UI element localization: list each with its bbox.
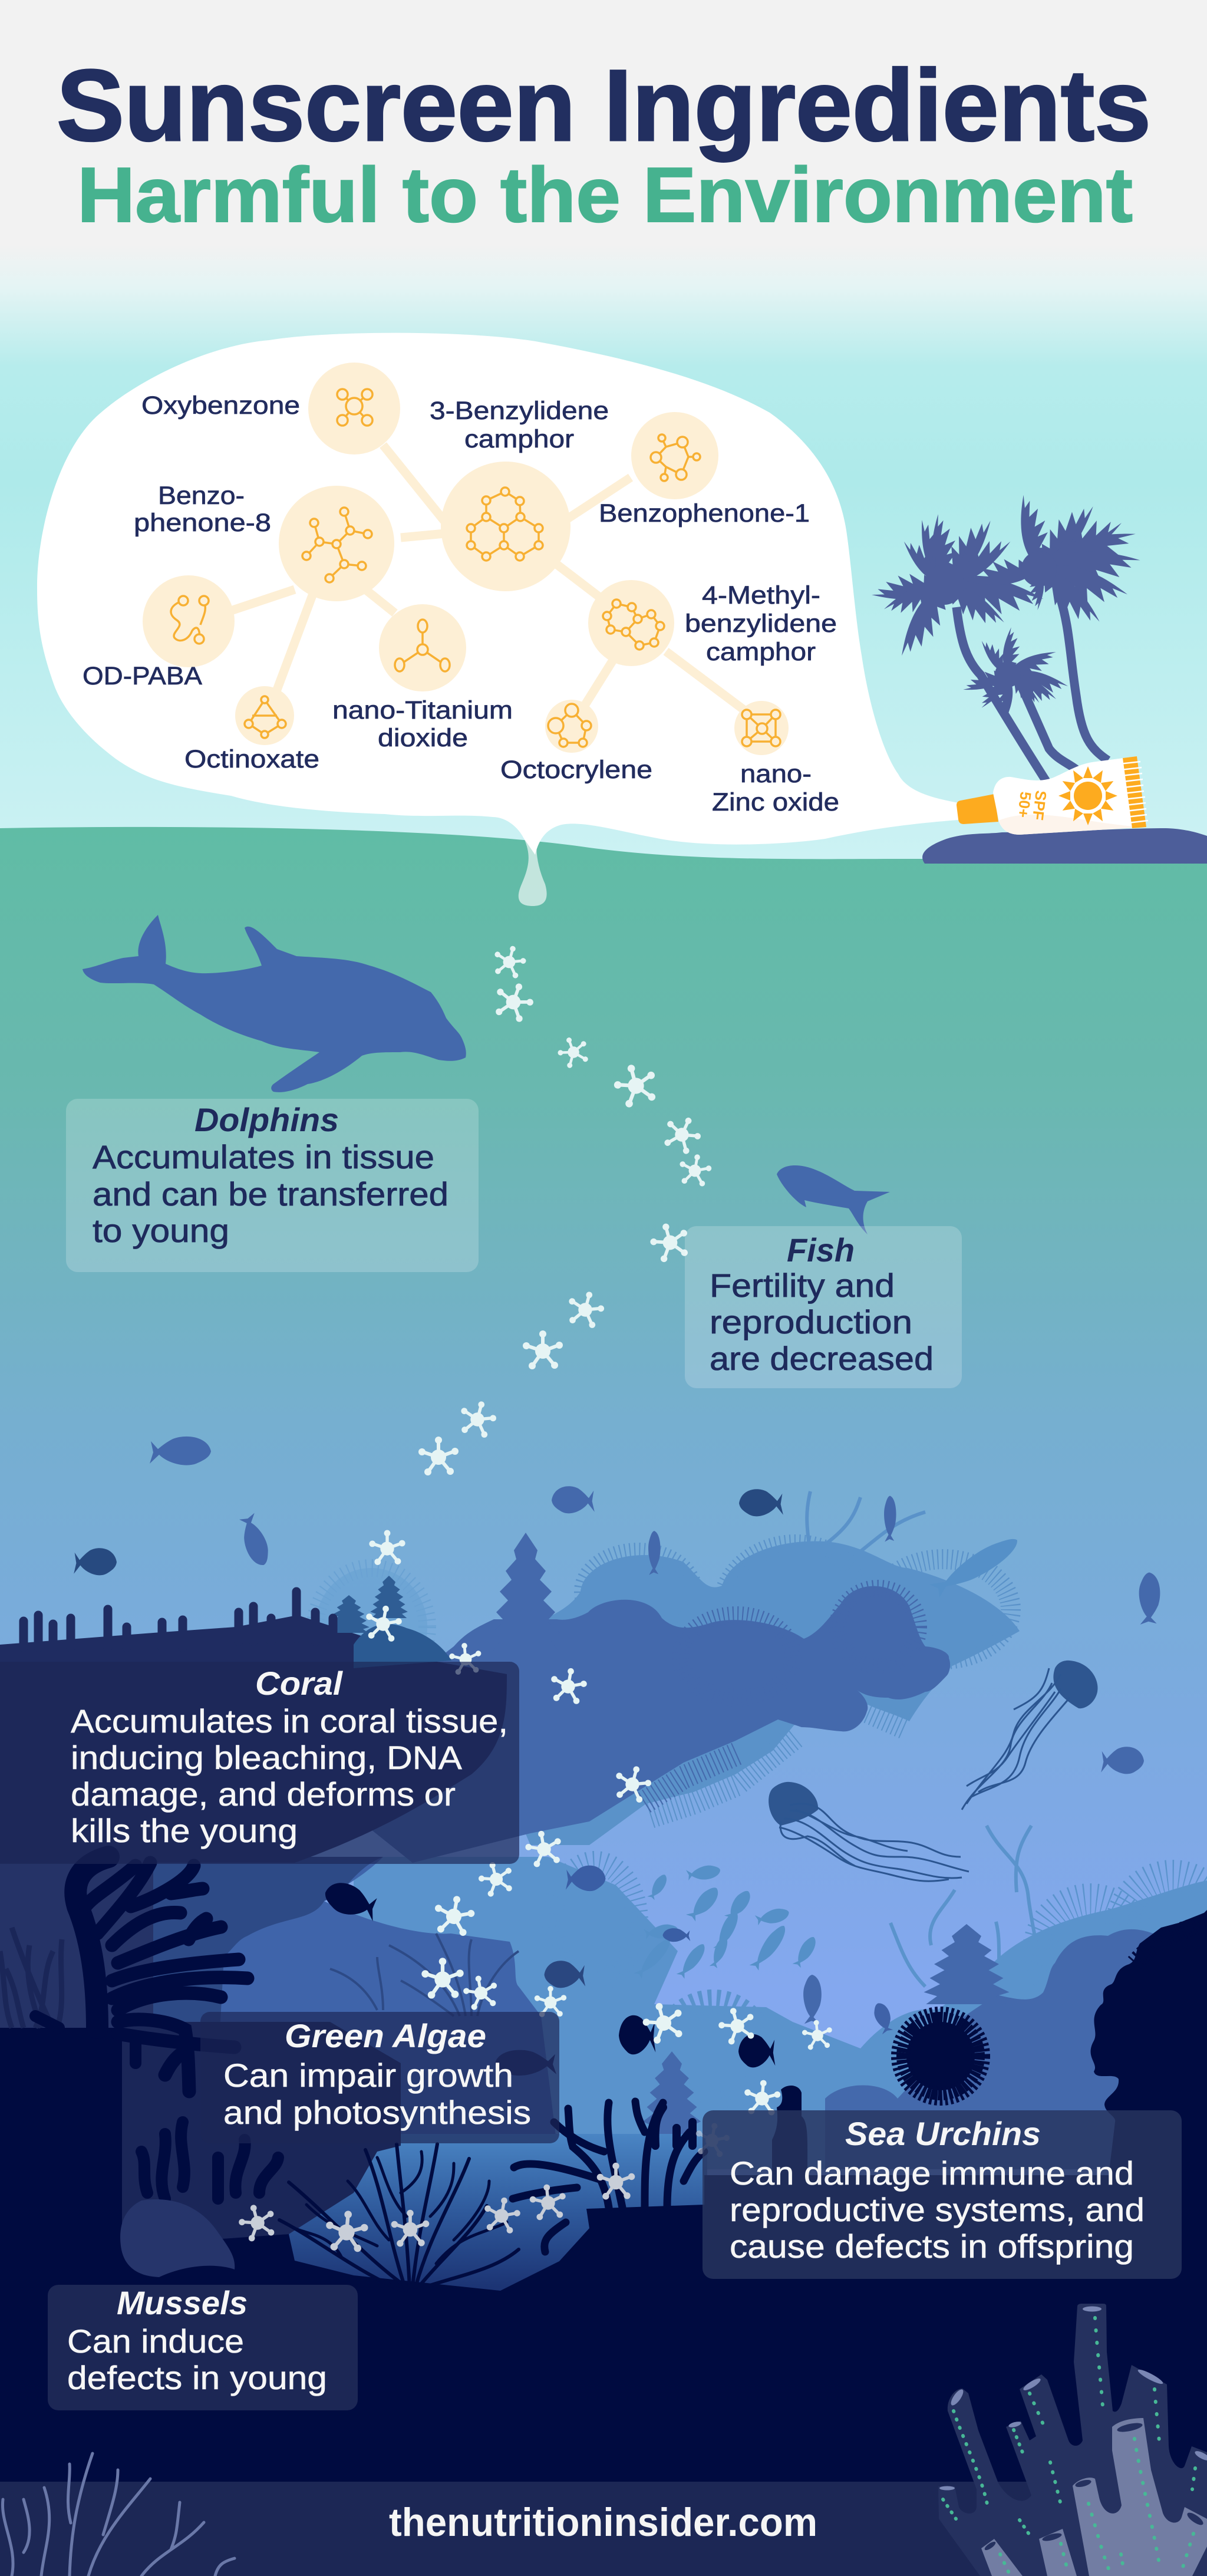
deep water behind foreground: [277, 2134, 707, 2299]
ingredient labels: Octinoxate: [184, 745, 319, 773]
speech cloud of ingredients: [37, 333, 958, 855]
node: Octocrylene: [545, 700, 598, 753]
info box: Green Algae: Green Algae: [285, 2017, 486, 2054]
lower particles on dark: [235, 2120, 732, 2254]
info box: Fish: are decreased: [710, 1340, 934, 1377]
palm trees: [870, 492, 1143, 781]
molecule diagram: [143, 363, 789, 755]
anemone on right mound: [924, 1924, 1009, 2004]
info box: Fish: Fertility and: [710, 1267, 895, 1304]
jellyfish 2: [962, 1661, 1098, 1810]
tube openings light: [939, 2306, 1207, 2490]
mid reef fringes: [642, 1589, 918, 1804]
reef fish above Fish box: [777, 1165, 890, 1234]
info box: Mussels: [48, 2284, 358, 2410]
sea urchin: [901, 2016, 981, 2096]
fan coral centre: [279, 2144, 519, 2291]
navy corals below green algae box: [141, 2122, 278, 2199]
info box: Dolphins: and can be transferred: [93, 1175, 448, 1213]
background fish: [74, 1437, 1160, 2076]
shell: [120, 2199, 235, 2277]
anemone near bottom: [643, 2051, 701, 2134]
background: ocean water: [0, 827, 1207, 2576]
SPF number: 50+: [1014, 790, 1035, 819]
school of small fish: [634, 1863, 819, 1981]
sea grass on reef: [330, 1933, 519, 2016]
sunscreen tube: [957, 756, 1148, 835]
info box: Fish: [685, 1226, 962, 1388]
second teal tuft: [328, 1595, 370, 1633]
footer band: [0, 2482, 1207, 2576]
mid reef mass: [295, 1586, 950, 1863]
ingredient labels: OD-PABA: [83, 662, 202, 690]
thin branching plant bottom-left: [2, 2453, 235, 2576]
ingredient labels: nano-Titanium: [332, 696, 513, 724]
dark coral row under coral box: [0, 1576, 507, 1863]
info box: Sea Urchins: [703, 2110, 1182, 2279]
dolphin: [83, 915, 466, 1092]
info box: Mussels: defects in young: [67, 2359, 327, 2396]
teal tufts: [370, 1576, 408, 1618]
right mass spiky fringe: [1135, 1923, 1207, 1963]
info box: Sea Urchins: Can damage immune and: [730, 2155, 1134, 2192]
light coral arm left: [981, 2539, 1023, 2576]
SPF label: SPF: [1029, 789, 1050, 821]
info box: Sea Urchins: cause defects in offspring: [730, 2228, 1134, 2265]
ingredient labels: camphor: [706, 638, 816, 666]
node: nano-Zinc oxide: [734, 701, 789, 755]
title: Sunscreen Ingredients: [57, 49, 1151, 162]
info box: Dolphins: Accumulates in tissue: [93, 1138, 434, 1175]
darker hill under coral box: [0, 1857, 383, 2169]
ingredient labels: camphor: [464, 425, 574, 453]
branching sprigs above coral: [807, 1491, 925, 1562]
node: nano-Titanium dioxide: [379, 604, 466, 691]
info box: Coral: [0, 1662, 519, 1864]
left background panel: [0, 1857, 153, 2169]
info box: Coral: inducing bleaching, DNA: [71, 1739, 463, 1776]
node: 3-Benzylidene camphor: [441, 462, 570, 591]
info box: Fish: Fish: [787, 1231, 855, 1269]
info box: Fish: reproduction: [710, 1303, 912, 1340]
ingredient labels: Oxybenzone: [141, 391, 300, 420]
info box: Coral: damage, and deforms or: [71, 1775, 456, 1813]
light coral arm middle: [1039, 2529, 1077, 2576]
tube crimp: [1123, 756, 1146, 828]
footer website url: thenutritioninsider.com: [389, 2500, 817, 2545]
foreground dark seabed: [0, 2028, 1207, 2576]
coral plume: [492, 1533, 560, 1651]
info box: Mussels: Mussels: [117, 2284, 248, 2321]
left fern fringe: [0, 1928, 62, 2028]
sunscreen drip: [519, 830, 547, 906]
tube nozzle: [957, 794, 998, 824]
info box: Dolphins: Dolphins: [194, 1101, 339, 1138]
info box: Dolphins: [66, 1099, 479, 1272]
info box: Coral: Coral: [255, 1665, 343, 1702]
sun icon: [1058, 766, 1117, 825]
lower coral fringes and grasses: [554, 1826, 1207, 2101]
connector lines: [224, 445, 748, 713]
branching coral centre right: [513, 2101, 704, 2252]
info box: Green Algae: and photosynthesis: [223, 2094, 531, 2131]
back coral body: [938, 2304, 1207, 2576]
node: Octinoxate: [235, 686, 294, 745]
info box: Green Algae: Can impair growth: [223, 2057, 513, 2094]
node: OD-PABA: [143, 575, 235, 667]
info box: Dolphins: to young: [93, 1212, 229, 1249]
tube coral bottom right: [938, 2304, 1207, 2576]
info box: Sea Urchins: reproductive systems, and: [730, 2191, 1145, 2228]
info box: Sea Urchins: Sea Urchins: [845, 2115, 1041, 2152]
small navy fingers: [655, 2107, 692, 2146]
tube body: [993, 756, 1146, 835]
island: [922, 828, 1207, 864]
palm crown 2: [965, 492, 1143, 635]
tube openings dark: [984, 2422, 1205, 2552]
right reef mound: [825, 1929, 1207, 2169]
teal hill: [354, 1624, 451, 1668]
info box: Coral: kills the young: [71, 1812, 298, 1849]
jellyfish 1: [769, 1782, 969, 1881]
hairy coral fringes: [584, 1544, 1011, 1816]
node: Benzophenone-1: [631, 412, 718, 499]
info box: Green Algae: [200, 2012, 559, 2143]
foreground branching coral left: [35, 1857, 248, 2091]
ingredient labels: 4-Methyl-: [702, 581, 820, 610]
ingredient labels: 3-Benzylidene: [430, 397, 609, 425]
chemical particles falling: [362, 942, 833, 2116]
ingredient labels: nano-: [740, 760, 812, 788]
right dark coral mass: [1091, 1910, 1207, 2181]
ingredient labels: Zinc oxide: [712, 788, 839, 816]
coral fingers: [24, 1592, 333, 1648]
palm crown 1: [870, 510, 1046, 665]
ingredient labels: [83, 391, 839, 816]
ingredient labels: phenone-8: [134, 509, 271, 537]
lower-left reef mass: [0, 1857, 560, 2169]
palm trunks: [957, 592, 1108, 781]
info box: Coral: Accumulates in coral tissue,: [71, 1702, 508, 1740]
ingredient labels: Benzo-: [158, 482, 245, 510]
ingredient labels: benzylidene: [685, 610, 837, 638]
ingredient labels: dioxide: [378, 724, 468, 752]
lower light coral layer: [354, 1857, 1207, 2169]
mid-navy patch under green algae box: [122, 2022, 401, 2246]
subtitle: Harmful to the Environment: [77, 151, 1133, 238]
background: sky: [0, 0, 1207, 872]
info box: Mussels: Can induce: [67, 2323, 244, 2360]
light coral main body: [1073, 2418, 1207, 2576]
node: Benzophenone-8: [279, 486, 394, 601]
background reef: faint ferns: [315, 1568, 427, 1686]
palm crown 3: [960, 627, 1070, 723]
ingredient labels: Octocrylene: [500, 756, 652, 784]
tube coral dots: [943, 2318, 1195, 2574]
node: 4-Methylbenzylidene camphor: [588, 580, 674, 666]
ingredient labels: Benzophenone-1: [599, 499, 810, 528]
background reef: light coral layer: [448, 1491, 1020, 1845]
node: Oxybenzone: [308, 363, 400, 454]
navy rock near sea urchins box: [772, 2086, 807, 2175]
